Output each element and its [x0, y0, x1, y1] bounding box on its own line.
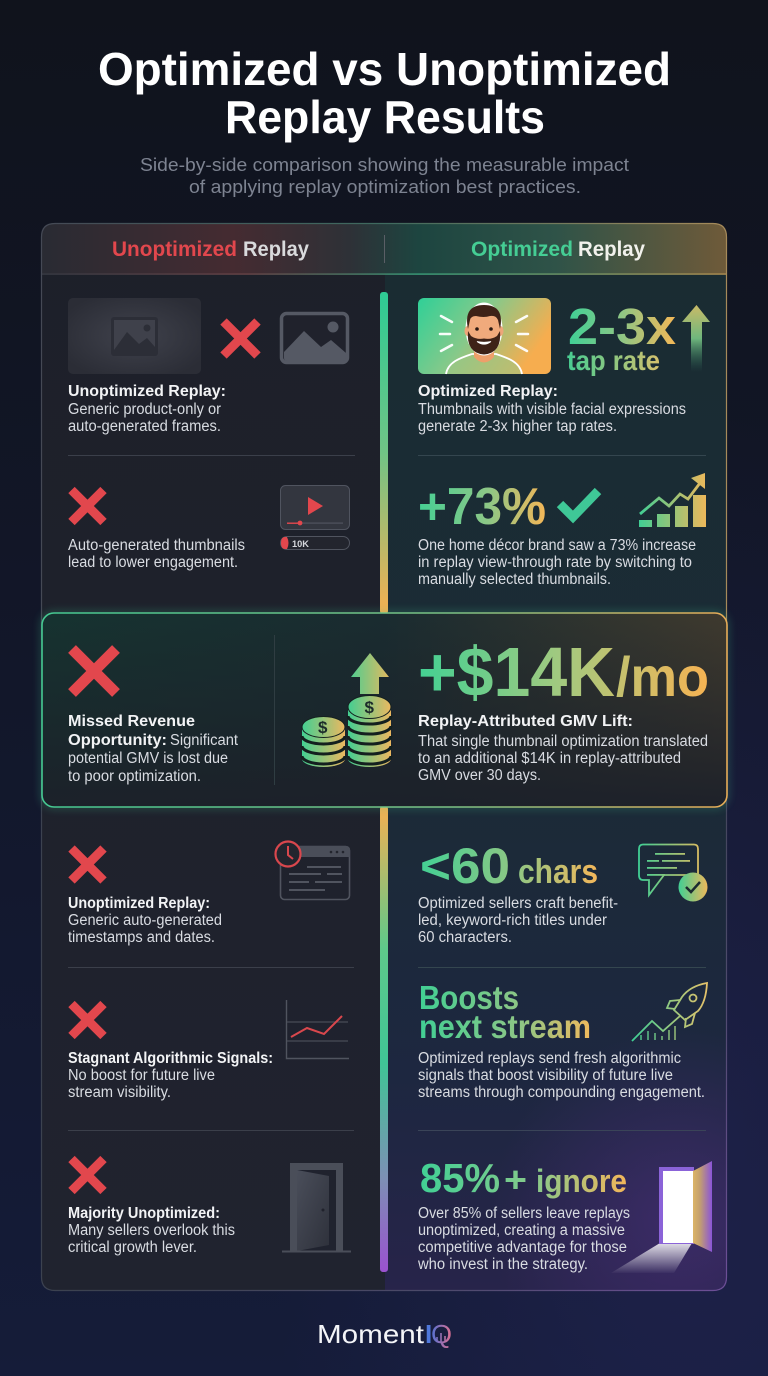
text: missed revenue: Missed Revenue — [68, 713, 195, 730]
text: GMV lift: Replay-Attributed GMV Lift: — [418, 713, 633, 730]
text: majority unoptimized: Majority Unoptimized: — [68, 1205, 220, 1222]
icon: chat bubble with check — [639, 844, 708, 902]
text: GMV lift: GMV over 30 days. — [418, 767, 541, 784]
text: stagnant signals — [68, 1050, 273, 1101]
text: GMV lift: to an additional $14K in replay-attributed — [418, 750, 681, 767]
icon: image placeholder — [282, 314, 348, 362]
text: home decor case: manually selected thumbnails. — [418, 571, 611, 588]
text: unoptimized thumbnails: Generic product-only or — [68, 401, 221, 418]
stat: 85%+ ignore — [420, 1155, 627, 1201]
stat: 85%+ ignore: ignore — [536, 1163, 627, 1199]
text: right column body copy: signals that boost visibility of future live — [418, 1067, 673, 1084]
icon: flat line chart — [286, 1000, 349, 1058]
stat: +73%: +73% — [418, 478, 546, 536]
text: right column body copy: led, keyword-rich titles under — [418, 912, 607, 929]
stat: +$14K/mo: +$14K — [418, 633, 615, 711]
stat: <60 chars: chars — [518, 853, 598, 891]
icon: red x — [72, 1004, 104, 1036]
center gradient bar — [380, 292, 388, 1272]
stat: 2-3x tap rate: tap rate — [567, 345, 660, 376]
icon: growth bars — [639, 473, 706, 527]
comparison panel — [41, 223, 727, 1291]
text: right column body copy: Optimized sellers craft benefit- — [418, 895, 618, 912]
icon: red x — [224, 322, 258, 356]
logo: MomentIQ: Moment — [317, 1319, 425, 1349]
text: stagnant signals: No boost for future live — [68, 1067, 215, 1084]
text: missed revenue — [68, 713, 239, 785]
text: generic timestamps: timestamps and dates. — [68, 929, 215, 946]
column heading: unoptimized: Replay — [243, 237, 309, 261]
text: right column body copy — [418, 895, 705, 1101]
text: generic timestamps: Unoptimized Replay: — [68, 895, 210, 912]
text: 85 percent ignore: who invest in the strategy. — [417, 1256, 588, 1273]
text: auto-generated thumbnails — [68, 537, 245, 571]
stat: <60 chars — [420, 838, 598, 894]
stat: boosts next stream: Boosts — [419, 979, 519, 1016]
text: 85 percent ignore — [417, 1205, 630, 1273]
stat: boosts next stream — [419, 979, 591, 1045]
icon: timestamp window with clock — [276, 842, 350, 900]
logo: MomentIQ — [317, 1319, 452, 1349]
text: majority unoptimized: Many sellers overlook this — [68, 1222, 235, 1239]
row dividers — [68, 455, 706, 1131]
text: missed revenue: to poor optimization. — [68, 768, 201, 785]
text: right column body copy: Optimized replays send fresh algorithmic — [418, 1050, 681, 1067]
stat: 2-3x tap rate: 2-3x — [568, 298, 676, 355]
text: unoptimized thumbnails — [68, 383, 226, 435]
stat: 85%+ ignore: 85% — [420, 1155, 500, 1201]
text: optimized thumbnails: Thumbnails with visible facial expressions — [418, 401, 686, 418]
text: stagnant signals: stream visibility. — [68, 1084, 171, 1101]
text: missed revenue: Opportunity: — [68, 732, 167, 749]
text: generic timestamps — [68, 895, 222, 946]
icon: video player with low views: 10K — [292, 539, 309, 550]
text: optimized thumbnails — [418, 383, 686, 435]
icon: face thumbnail — [418, 298, 551, 374]
icon: grey door — [282, 1163, 351, 1252]
text: stagnant signals: Stagnant Algorithmic Signals: — [68, 1050, 273, 1067]
logo: MomentIQ: Q — [431, 1319, 452, 1349]
title: Optimized vs Unoptimized — [98, 43, 671, 95]
stat: 2-3x tap rate — [567, 298, 676, 376]
icon: up arrow — [682, 305, 710, 372]
text: home decor case — [418, 537, 696, 588]
icon: coin stacks with arrow: $ — [318, 718, 328, 737]
text: GMV lift — [418, 713, 708, 784]
text: majority unoptimized — [68, 1205, 235, 1256]
text: 85 percent ignore: competitive advantage for those — [418, 1239, 627, 1256]
icon: glowing open door — [611, 1161, 712, 1273]
text: 85 percent ignore: unoptimized, creating a massive — [418, 1222, 625, 1239]
text: generic timestamps: Generic auto-generated — [68, 912, 222, 929]
text: auto-generated thumbnails: lead to lower engagement. — [68, 554, 238, 571]
text: missed revenue: potential GMV is lost due — [68, 750, 228, 767]
icon: coin stacks with arrow: $ — [364, 698, 374, 717]
text: unoptimized thumbnails: Unoptimized Replay: — [68, 383, 226, 400]
text: missed revenue: Significant — [170, 732, 239, 749]
icon: red x — [72, 490, 104, 522]
subtitle: Side-by-side comparison showing the measurable impact — [140, 154, 629, 175]
text: right column body copy: streams through compounding engagement. — [418, 1084, 705, 1101]
icon: coin stacks with arrow — [302, 653, 391, 767]
stat: +$14K/mo: /mo — [616, 645, 709, 708]
title — [98, 43, 671, 143]
logo: MomentIQ: I — [425, 1319, 432, 1349]
column heading: optimized: Optimized — [471, 237, 573, 261]
text: unoptimized thumbnails: auto-generated frames. — [68, 418, 221, 435]
icon: red x — [72, 848, 104, 880]
title: Replay Results — [225, 91, 545, 143]
icon: red x — [72, 1159, 104, 1191]
panel: revenue highlight band — [42, 613, 727, 807]
text: optimized thumbnails: generate 2-3x higher tap rates. — [418, 418, 617, 435]
text: majority unoptimized: critical growth lever. — [68, 1239, 197, 1256]
icon: green check — [560, 491, 598, 517]
column heading: optimized: Replay — [578, 237, 645, 261]
column heading: unoptimized: Unoptimized — [112, 237, 237, 261]
text: home decor case: in replay view-through rate by switching to — [418, 554, 692, 571]
column heading: optimized — [471, 237, 645, 261]
text: auto-generated thumbnails: Auto-generated thumbnails — [68, 537, 245, 554]
text: 85 percent ignore: Over 85% of sellers leave replays — [418, 1205, 630, 1222]
subtitle — [140, 154, 629, 197]
text: home decor case: One home décor brand saw a 73% increase — [418, 537, 696, 554]
text: optimized thumbnails: Optimized Replay: — [418, 383, 558, 400]
stat: boosts next stream: next stream — [419, 1008, 591, 1045]
stat: 85%+ ignore: + — [504, 1159, 527, 1200]
icon: rocket and growth line — [632, 983, 707, 1041]
text: GMV lift: That single thumbnail optimization translated — [418, 733, 708, 750]
icon: video player with low views — [280, 486, 350, 550]
icon: generic grey thumbnail — [68, 298, 201, 374]
stat: <60 chars: <60 — [420, 838, 510, 894]
icon: large red x — [72, 649, 116, 693]
subtitle: of applying replay optimization best practices. — [189, 176, 581, 197]
text: right column body copy: 60 characters. — [418, 929, 512, 946]
column heading: unoptimized — [112, 237, 309, 261]
